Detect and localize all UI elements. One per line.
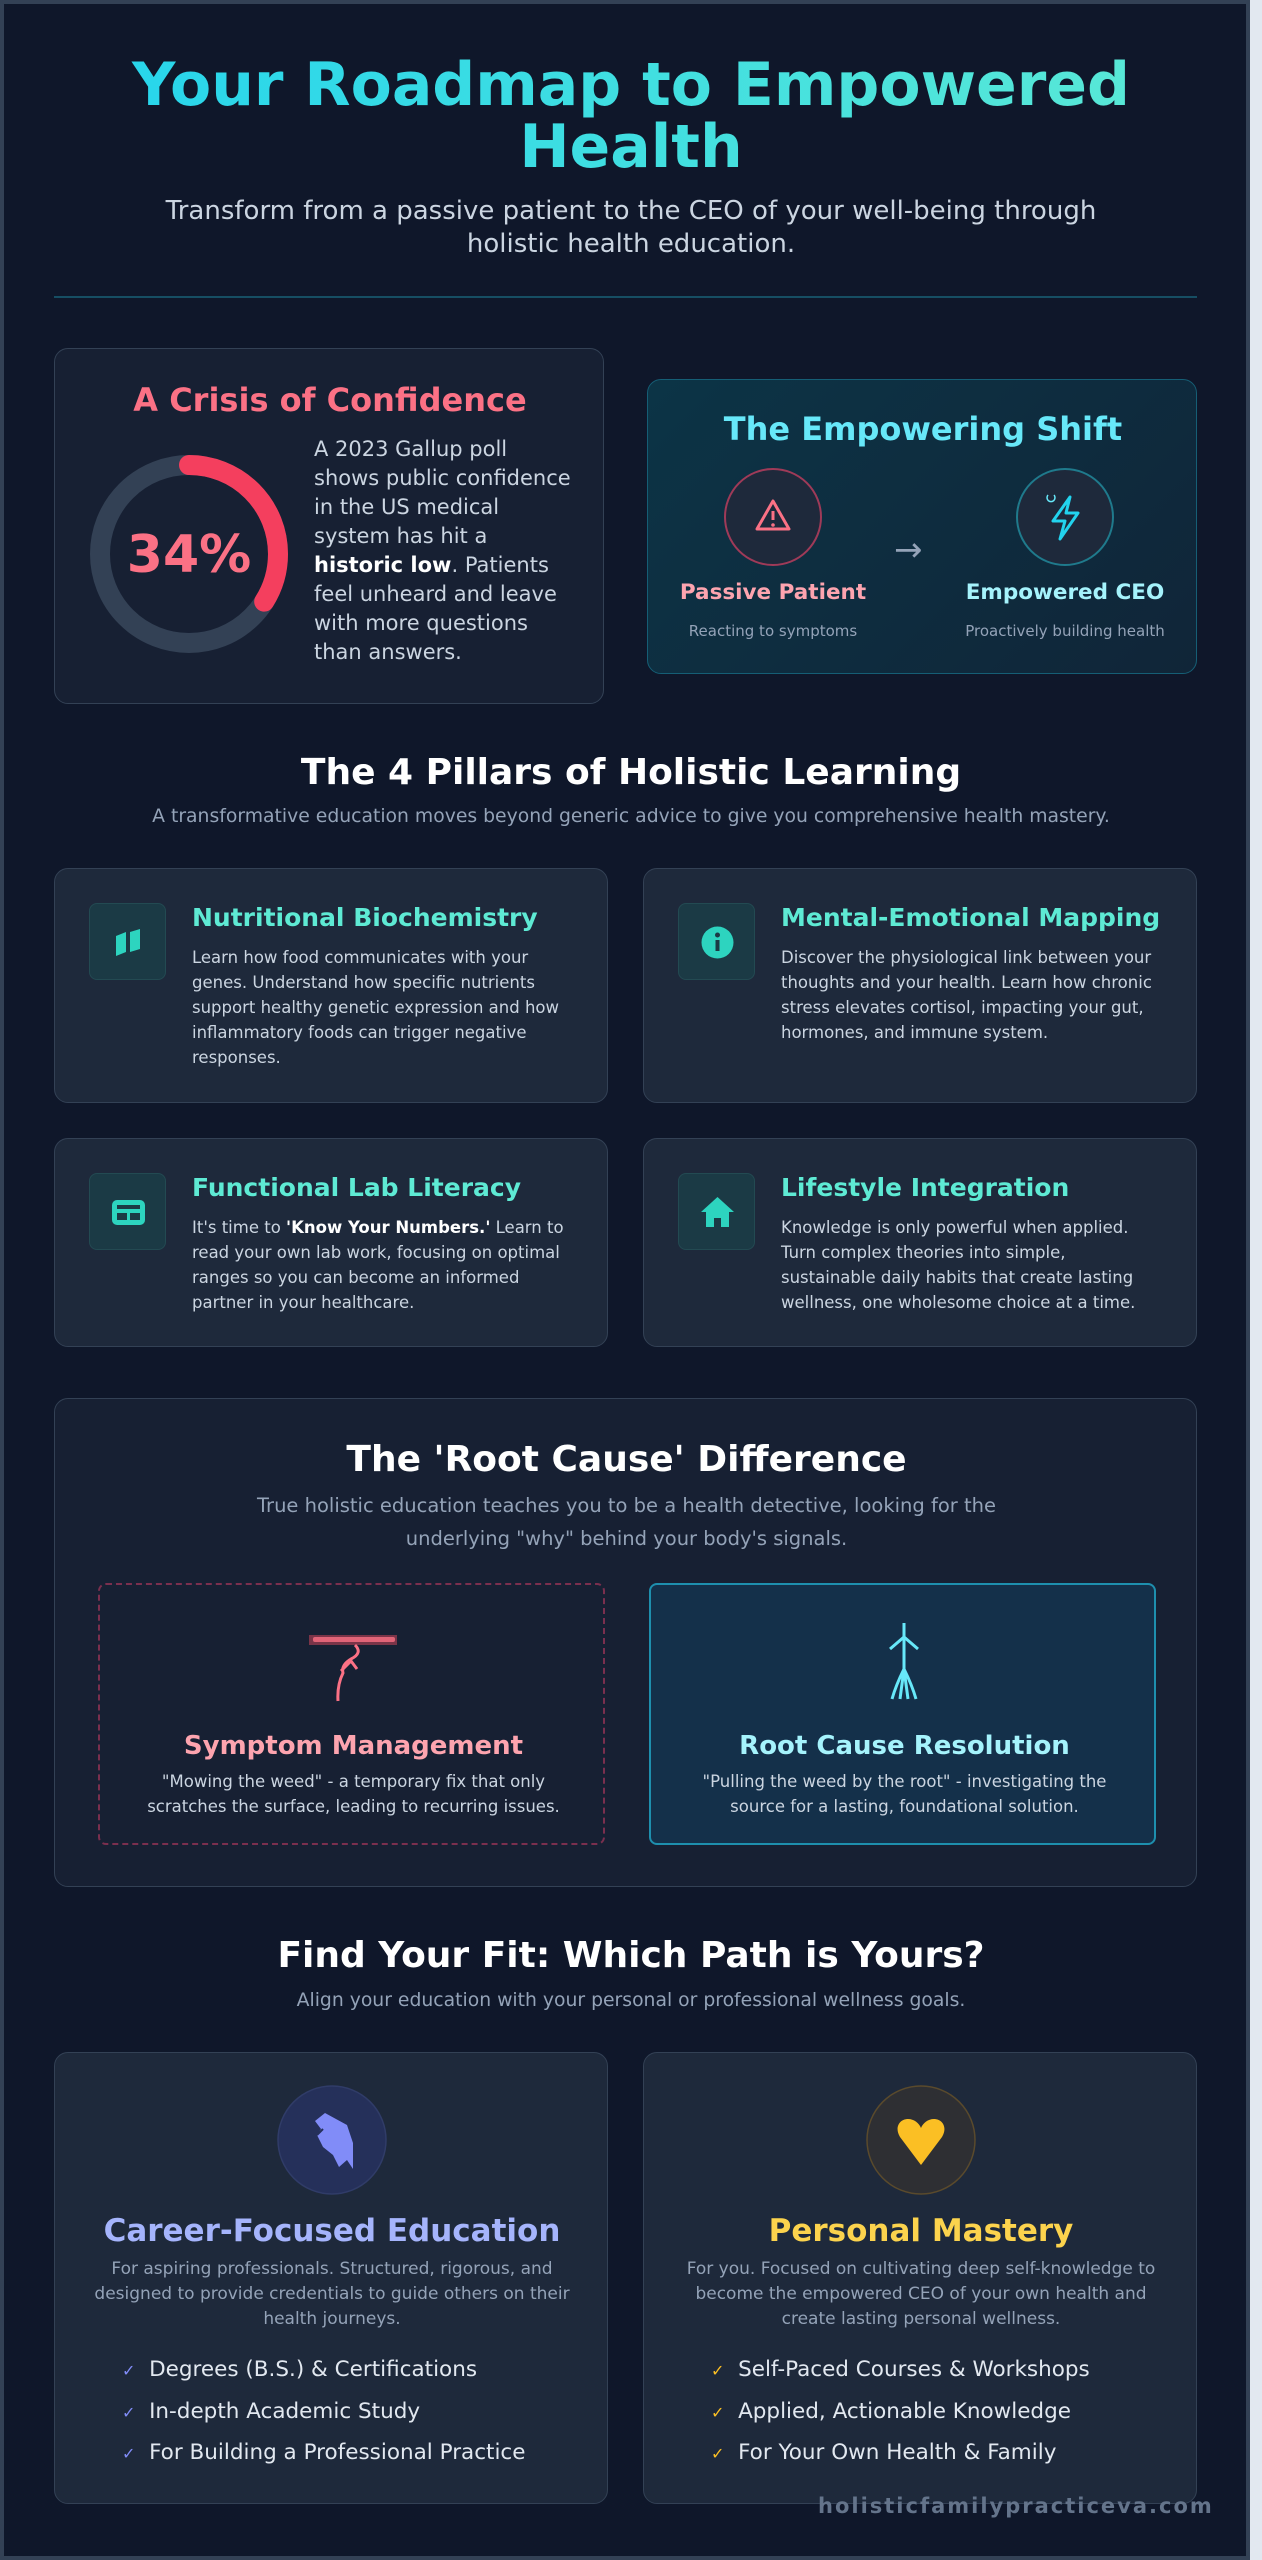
heading: 4 pillars: The 4 Pillars of Holistic Learning	[301, 752, 961, 793]
list: career	[122, 2357, 525, 2465]
panel: functional lab literacy: Functional Lab Literacy	[192, 1173, 521, 1202]
panel: root cause difference	[54, 1398, 1197, 1887]
panel: crisis of confidence	[54, 348, 604, 704]
list: personal: ✓ Applied, Actionable Knowledge	[711, 2399, 1071, 2424]
text: root cause intro: True holistic education teaches you to be a health detective, looking for the underlying "why" behind your body's signals.	[257, 1494, 996, 1550]
icon: info	[678, 903, 755, 980]
text: mowing: "Mowing the weed" - a temporary fix that only scratches the surface, leading to recurring issues.	[147, 1772, 560, 1816]
subheading: pillars: A transformative education moves beyond generic advice to give you comprehensive health mastery.	[152, 806, 1110, 827]
arrow: →	[894, 530, 922, 570]
text: gallup poll	[314, 437, 571, 664]
text: gallup poll: feel unheard and leave	[314, 582, 557, 606]
panel: functional lab literacy	[54, 1138, 608, 1347]
text: personal desc: For you. Focused on cultivating deep self-knowledge to become the empowered CEO of your own health and create lasting personal wellness.	[687, 2259, 1155, 2329]
heading: find your fit: Find Your Fit: Which Path is Yours?	[277, 1935, 985, 1976]
panel: career-focused	[54, 2052, 608, 2504]
list: personal	[711, 2357, 1090, 2465]
icon: root	[889, 1623, 919, 1700]
label: reacting: Reacting to symptoms	[689, 622, 857, 640]
heading: crisis: A Crisis of Confidence	[133, 381, 527, 419]
panel: nutritional biochemistry: Learn how food communicates with your genes. Understand how specific nutrients support healthy genetic expression and how inflammatory foods can trigger negative responses.	[192, 948, 559, 1067]
panel: mental-emotional mapping: Mental-Emotional Mapping	[781, 903, 1160, 932]
panel: nutritional biochemistry: Nutritional Biochemistry	[192, 903, 538, 932]
text: gallup poll: shows public confidence	[314, 466, 571, 490]
box: root cause resolution	[649, 1583, 1156, 1845]
panel: personal mastery	[643, 2052, 1197, 2504]
title	[0, 54, 1262, 178]
panel: lifestyle integration: Lifestyle Integration	[781, 1173, 1069, 1202]
list: personal: ✓ For Your Own Health & Family	[711, 2440, 1056, 2465]
text: gallup poll: than answers.	[314, 640, 462, 664]
label: symptom management: Symptom Management	[184, 1731, 523, 1761]
heading: career: Career-Focused Education	[104, 2213, 560, 2249]
label: proactive: Proactively building health	[965, 622, 1165, 640]
chart: donut 34%: 34%	[127, 525, 251, 585]
list: personal: ✓ Self-Paced Courses & Workshops	[711, 2357, 1090, 2382]
text: gallup poll: system has hit a	[314, 524, 487, 548]
list: career: ✓ For Building a Professional Practice	[122, 2440, 525, 2465]
icon: lightning	[1016, 468, 1114, 566]
label: passive patient: Passive Patient	[680, 580, 866, 605]
subheading: fit: Align your education with your personal or professional wellness goals.	[297, 1990, 965, 2011]
box: symptom management	[98, 1583, 605, 1845]
text: gallup poll: with more questions	[314, 611, 528, 635]
panel: nutritional biochemistry	[54, 868, 608, 1103]
panel: mental-emotional mapping	[643, 868, 1197, 1103]
label: empowered ceo: Empowered CEO	[966, 580, 1164, 605]
list: career: ✓ Degrees (B.S.) & Certifications	[122, 2357, 477, 2382]
icon: mowed weed	[309, 1635, 397, 1702]
icon: home	[678, 1173, 755, 1250]
heading: root cause: The 'Root Cause' Difference	[346, 1439, 907, 1480]
heading: shift: The Empowering Shift	[724, 410, 1122, 448]
text: career desc: For aspiring professionals. Structured, rigorous, and designed to provide credentials to guide others on their health journeys.	[94, 2259, 570, 2329]
title: Your Roadmap to Empowered	[132, 50, 1130, 120]
heading: personal: Personal Mastery	[769, 2213, 1073, 2249]
chart: donut 34%	[90, 455, 288, 653]
subtitle: Transform from a passive patient to the CEO of your well-being through holistic health education.	[166, 196, 1096, 259]
title: Health	[519, 112, 743, 182]
text: gallup poll: historic low. Patients	[314, 553, 549, 577]
panel: lifestyle integration: Knowledge is only powerful when applied. Turn complex theories into simple, sustainable daily habits that create lasting wellness, one wholesome choice at a time.	[781, 1218, 1135, 1312]
icon: warning	[724, 468, 822, 566]
label: root cause resolution: Root Cause Resolution	[739, 1731, 1070, 1761]
footer: website: holisticfamilypracticeva.com	[818, 2494, 1214, 2518]
icon: map	[89, 903, 166, 980]
text: gallup poll: A 2023 Gallup poll	[314, 437, 507, 461]
panel: lifestyle integration	[643, 1138, 1197, 1347]
panel: functional lab literacy: It's time to 'Know Your Numbers.' Learn to read your own lab work, focusing on optimal ranges so you can become an informed partner in your healthcare.	[192, 1218, 564, 1312]
panel: mental-emotional mapping: Discover the physiological link between your thoughts and your health. Learn how chronic stress elevates cortisol, impacting your gut, hormones, and immune system.	[781, 948, 1152, 1042]
panel: empowering shift	[647, 379, 1197, 674]
icon: heart	[866, 2085, 976, 2195]
text: pulling: "Pulling the weed by the root" - investigating the source for a lasting, foundational solution.	[703, 1772, 1106, 1816]
icon: graduation	[277, 2085, 387, 2195]
icon: table	[89, 1173, 166, 1250]
list: career: ✓ In-depth Academic Study	[122, 2399, 420, 2424]
text: gallup poll: in the US medical	[314, 495, 499, 519]
